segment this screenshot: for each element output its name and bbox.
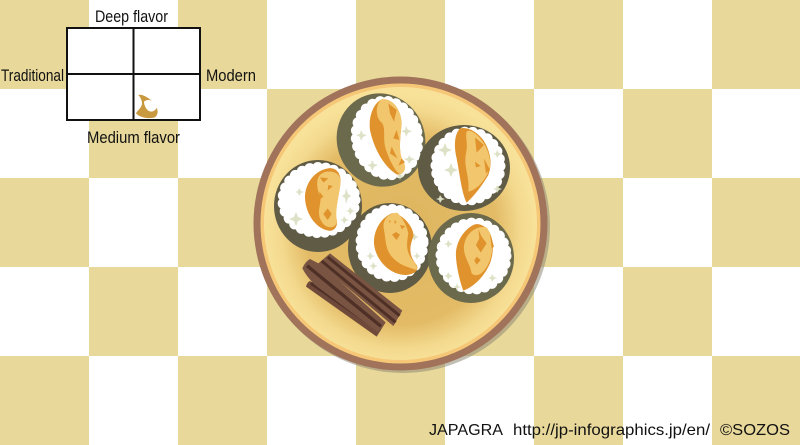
- sushi roll: centre bottom: [348, 203, 432, 293]
- filling: [456, 224, 494, 291]
- filling: [370, 99, 405, 175]
- sushi roll: right bottom: [428, 213, 514, 303]
- sushi roll: top: [324, 81, 438, 199]
- icon: sushi marker: [136, 95, 158, 118]
- filling: [305, 168, 341, 231]
- plate: [254, 76, 550, 373]
- credit line: JAPAGRA: [429, 422, 503, 439]
- cinnamon sticks: [302, 253, 402, 337]
- sushi roll: left: [274, 160, 362, 252]
- credit line: ©SOZOS: [720, 422, 790, 439]
- axis label: medium flavor: Medium flavor: [87, 128, 180, 147]
- credit line: http://jp-infographics.jp/en/: [513, 422, 711, 439]
- filling: [455, 128, 491, 203]
- sushi roll: right: [418, 125, 510, 211]
- quadrant chart: [67, 28, 200, 120]
- axis label: deep flavor: Deep flavor: [95, 7, 168, 26]
- credit line: [429, 422, 790, 439]
- axis label: modern: Modern: [206, 66, 256, 85]
- filling: [374, 213, 417, 275]
- axis label: traditional: Traditional: [1, 66, 64, 85]
